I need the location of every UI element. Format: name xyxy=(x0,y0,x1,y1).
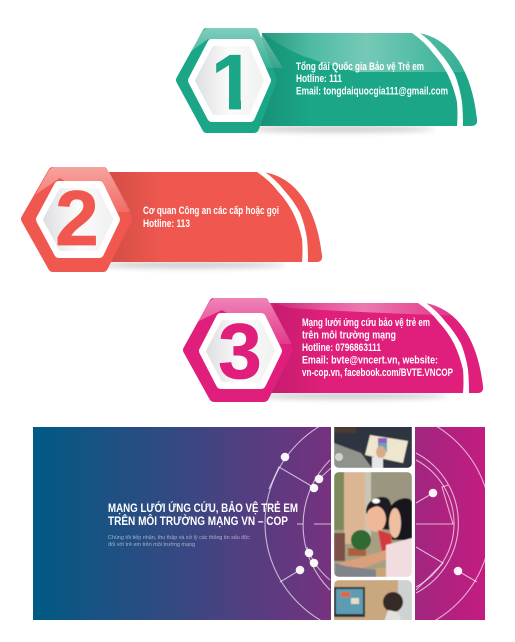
hexagon 1: 1 xyxy=(211,38,255,126)
photo: two girls at laptop xyxy=(334,472,412,577)
banner heading: TRÊN MÔI TRƯỜNG MẠNG VN – COP xyxy=(108,515,288,528)
photo: child with tablet xyxy=(334,427,412,468)
text: contact 3: Mạng lưới ứng cứu bảo vệ trẻ em xyxy=(302,317,430,329)
stripe 1 xyxy=(412,33,463,126)
panel: contact 1 xyxy=(181,28,477,132)
hexagon 1 xyxy=(181,28,283,128)
text: contact 3: Email: bvte@vncert.vn, website: xyxy=(302,354,438,366)
photo column background xyxy=(331,427,415,620)
hexagon 2: 2 xyxy=(55,174,99,262)
banner description xyxy=(108,534,250,547)
banner heading xyxy=(108,502,298,528)
band 3 xyxy=(256,303,483,393)
photo: child at computer xyxy=(334,580,412,620)
hexagon 3: 3 xyxy=(218,307,262,395)
banner heading: MẠNG LƯỚI ỨNG CỨU, BẢO VỆ TRẺ EM xyxy=(108,502,298,515)
band 1 xyxy=(250,33,477,126)
circuit nodes xyxy=(281,453,462,575)
band 2 xyxy=(95,172,322,262)
banner description: Chúng tôi tiếp nhận, thu thập và xử lý các thông tin xấu độc xyxy=(108,534,250,541)
text: contact 2: Cơ quan Công an các cấp hoặc gọi xyxy=(143,205,279,217)
text: contact 2: Hotline: 113 xyxy=(143,218,190,230)
text: contact 3: Hotline: 0796863111 xyxy=(302,342,381,354)
hexagon 3 xyxy=(188,298,292,397)
panel: contact 2 xyxy=(26,167,322,268)
banner description: đối với trẻ em trên môi trường mạng xyxy=(108,542,195,548)
hexagon 2 xyxy=(26,167,131,267)
panel: contact 3 xyxy=(188,298,483,399)
text: contact 3: trên môi trường mạng xyxy=(302,330,396,342)
circuit pattern xyxy=(264,427,485,620)
text: contact 1 xyxy=(296,61,448,98)
text: contact 1: Hotline: 111 xyxy=(296,73,342,85)
text: contact 3 xyxy=(302,317,453,379)
text: contact 3: vn-cop.vn, facebook.com/BVTE.VNCOP xyxy=(302,367,453,379)
text: contact 1: Tổng đài Quốc gia Bảo vệ Trẻ em xyxy=(296,61,424,73)
panel: VN-COP banner xyxy=(33,427,485,620)
text: contact 1: Email: tongdaiquocgia111@gmail.com xyxy=(296,86,448,98)
text: contact 2 xyxy=(143,205,279,230)
